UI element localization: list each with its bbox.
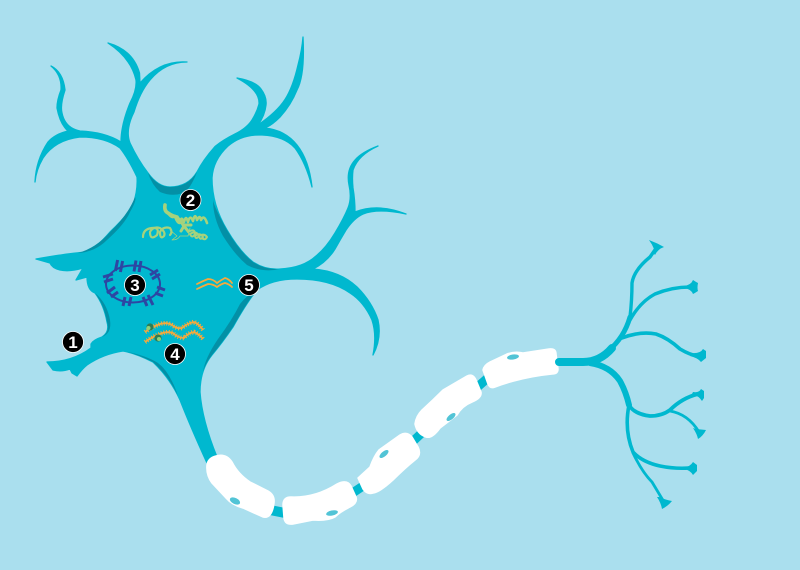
organelle: protein tangle (143, 205, 207, 240)
number badge 2: 2 (186, 191, 195, 210)
organelle: messenger RNA strands (197, 278, 232, 289)
number badge 4 (164, 344, 186, 364)
axon terminal branches (559, 240, 706, 509)
organelle: ribosomes on RNA (145, 322, 203, 342)
myelin sheath 3 (358, 433, 419, 494)
number badge 4: 4 (170, 345, 180, 364)
number badge 5 (238, 274, 260, 296)
number badge 3 (124, 274, 146, 296)
cell body shadows (78, 172, 280, 396)
number badge 5: 5 (244, 276, 254, 295)
axon segments between myelin sheaths (265, 376, 490, 514)
myelin sheath 4 (415, 375, 481, 437)
terminal bulbs (649, 240, 706, 509)
myelin sheath 1 (207, 455, 274, 517)
number badge 3: 3 (130, 276, 140, 295)
myelin sheath 2 (283, 482, 356, 524)
myelin sheaths (207, 349, 558, 524)
cell body and dendrites (35, 37, 406, 463)
number badge 1: 1 (68, 333, 78, 352)
myelin sheath 5 (483, 349, 558, 388)
organelle: nucleus with DNA marks (103, 260, 165, 306)
number badge 2 (180, 190, 201, 210)
number badge 1 (62, 332, 84, 352)
ribosome balls (146, 323, 162, 342)
